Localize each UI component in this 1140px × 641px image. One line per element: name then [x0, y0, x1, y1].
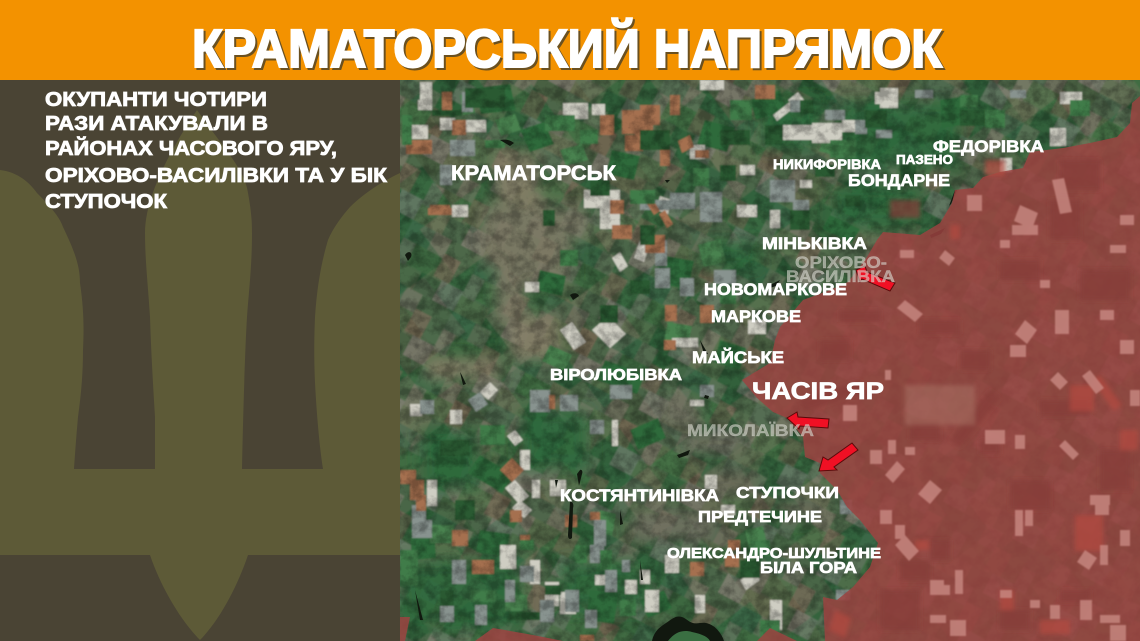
river and water bodies — [405, 140, 957, 641]
label: Orikhovo: ОРІХОВО- — [795, 253, 887, 272]
fields inside occupied territory — [800, 160, 1140, 641]
fields: white — [410, 80, 1082, 630]
label: Oleksandro-Shultyne: ОЛЕКСАНДРО-ШУЛЬТИНЕ — [667, 545, 881, 562]
label: Bondarne: БОНДАРНЕ — [848, 171, 950, 190]
label: Mykolaivka: МИКОЛАЇВКА — [687, 421, 814, 440]
text block: summary: ОКУПАНТИ ЧОТИРИ — [45, 89, 267, 111]
title: КРАМАТОРСЬКИЙ НАПРЯМОК — [192, 18, 943, 79]
occupied territory overlay — [400, 96, 1140, 641]
label: Novomarkove: НОВОМАРКОВЕ — [704, 280, 847, 299]
label: Fedorivka: ФЕДОРІВКА — [933, 137, 1044, 156]
fields: dark green — [432, 88, 990, 620]
fields: grey-blue — [412, 90, 1026, 628]
label: Maiske: МАЙСЬКЕ — [692, 348, 784, 367]
arrow: Mykolaivka — [787, 412, 829, 429]
label: Stupochky: СТУПОЧКИ — [736, 485, 839, 502]
label: Kostiantynivka: КОСТЯНТИНІВКА — [560, 486, 719, 505]
arrow: Orikhovo-Vasylivka — [856, 266, 895, 291]
text block: summary: СТУПОЧОК — [45, 191, 168, 213]
text block: summary: ОРІХОВО-ВАСИЛІВКИ ТА У БІК — [45, 165, 388, 187]
text block: summary: РАЗИ АТАКУВАЛИ В — [45, 113, 268, 135]
noise texture — [400, 80, 1140, 641]
arrow: Stupochky — [819, 443, 858, 471]
label: Vasylivka: ВАСИЛІВКА — [786, 267, 895, 286]
panel: left text panel — [0, 80, 400, 641]
label: Chasiv Yar: ЧАСІВ ЯР — [752, 378, 884, 405]
text block: summary — [45, 89, 388, 213]
label: Virolyubivka: ВІРОЛЮБІВКА — [550, 367, 683, 384]
label: Minkivka: МІНЬКІВКА — [762, 234, 867, 253]
urban and bare ground — [400, 100, 960, 630]
label: Nykyforivka: НИКИФОРІВКА — [773, 156, 881, 172]
fields: large green parcels — [410, 84, 968, 624]
label: Markove: МАРКОВЕ — [711, 307, 801, 326]
label: Predtechyne: ПРЕДТЕЧИНЕ — [698, 509, 822, 526]
map labels — [451, 137, 1044, 577]
icon: trident emblem — [0, 110, 400, 640]
label: Bila Hora: БІЛА ГОРА — [760, 560, 858, 577]
text block: summary: РАЙОНАХ ЧАСОВОГО ЯРУ, — [45, 136, 337, 160]
fields: orange-brown — [400, 85, 775, 641]
label: Kramatorsk: КРАМАТОРСЬК — [451, 162, 616, 185]
title banner — [0, 0, 1140, 80]
label: Pazeno: ПАЗЕНО — [896, 152, 953, 167]
satellite map — [380, 60, 1140, 641]
fields: bright green — [400, 95, 1090, 640]
